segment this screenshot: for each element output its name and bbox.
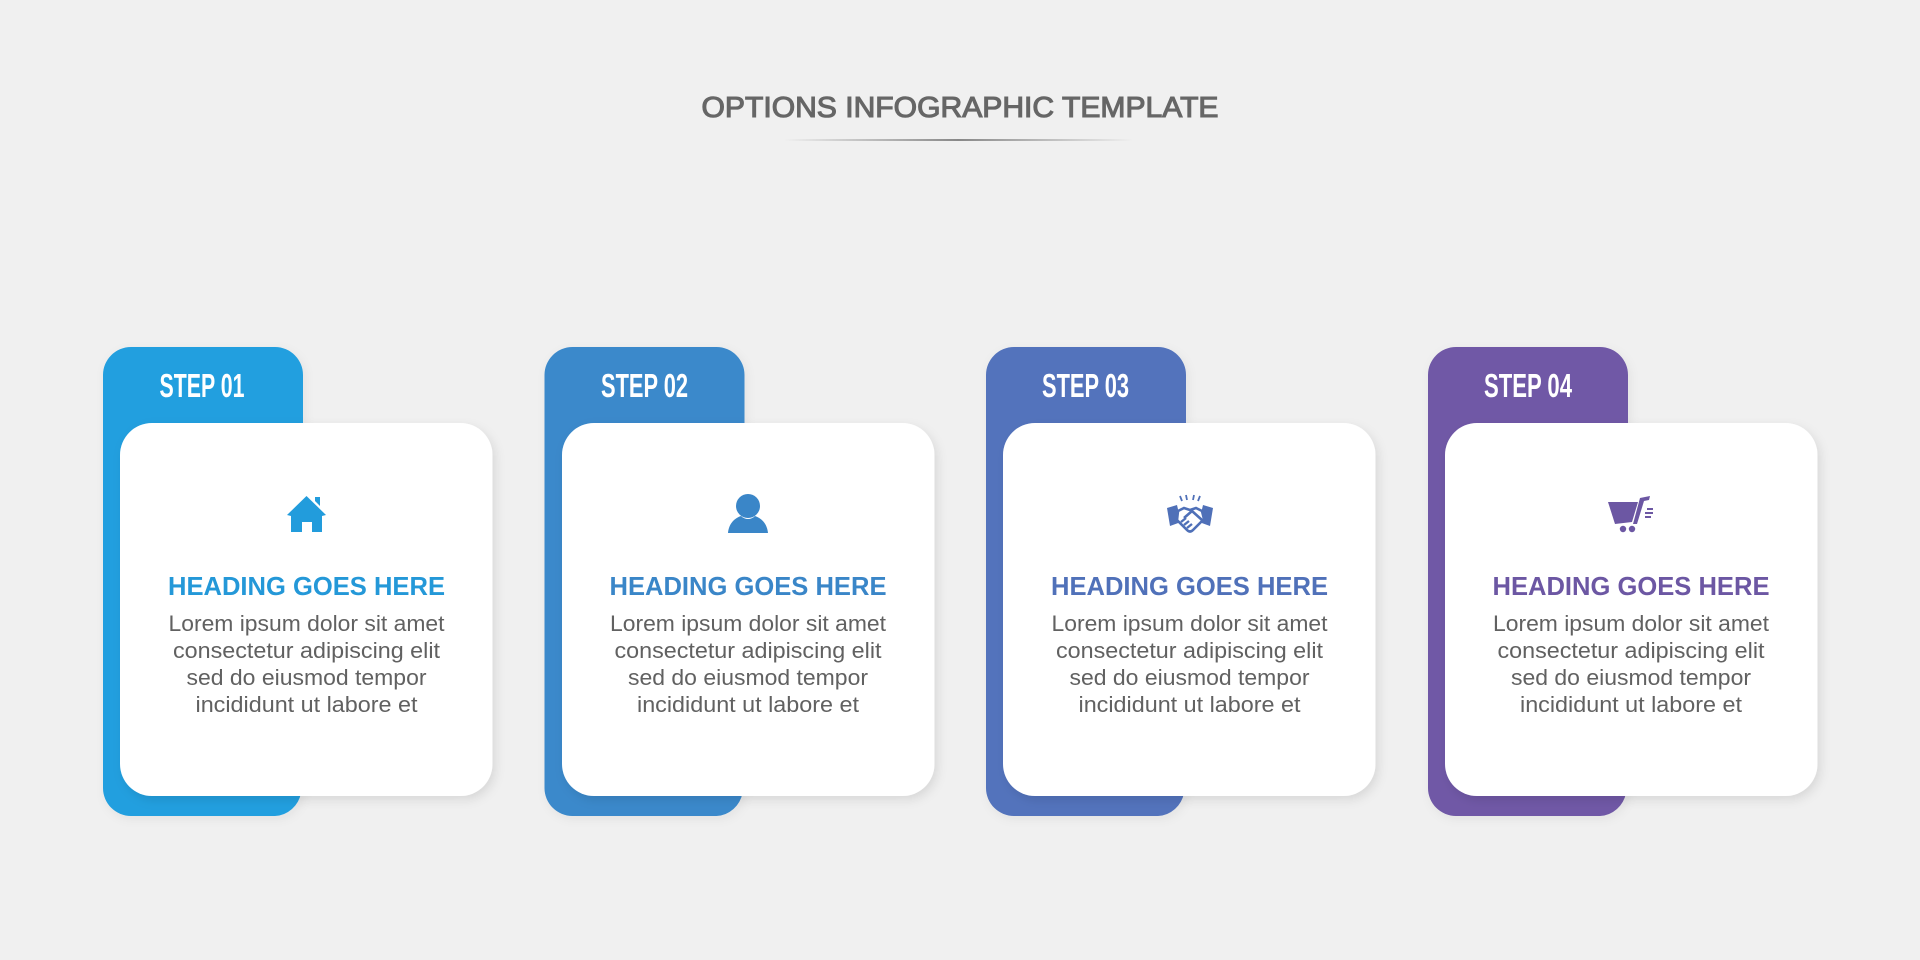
- step 04 description: incididunt ut labore et: [1520, 692, 1742, 717]
- step 03 description: Lorem ipsum dolor sit amet: [1052, 611, 1328, 636]
- step 01 description: Lorem ipsum dolor sit amet: [168, 611, 444, 636]
- step 04 heading: HEADING GOES HERE: [1492, 571, 1770, 601]
- step 02 tab: [544, 347, 744, 816]
- step 01 description: [168, 611, 444, 717]
- step 02 heading: HEADING GOES HERE: [610, 571, 886, 601]
- step 01 heading: HEADING GOES HERE: [168, 571, 445, 601]
- step 02 description: consectetur adipiscing elit: [614, 638, 882, 663]
- step 02 description: [610, 611, 886, 717]
- step 01 label: STEP 01: [160, 367, 244, 404]
- step 01 description: sed do eiusmod tempor: [186, 665, 426, 690]
- step 02 card: [562, 423, 934, 796]
- step 03 label: STEP 03: [1042, 367, 1129, 404]
- step 03 tab: [986, 347, 1186, 816]
- icon: shopping cart: [1608, 496, 1653, 532]
- title: OPTIONS INFOGRAPHIC TEMPLATE: [702, 92, 1218, 124]
- step 04 card: [1445, 423, 1818, 796]
- step 03 description: sed do eiusmod tempor: [1070, 665, 1310, 690]
- step 03 description: consectetur adipiscing elit: [1056, 638, 1323, 663]
- panel: step 02: [544, 347, 934, 816]
- step 03 description: incididunt ut labore et: [1078, 692, 1300, 717]
- step 01 card: [120, 423, 492, 796]
- step 04 description: sed do eiusmod tempor: [1511, 665, 1751, 690]
- step 01 description: consectetur adipiscing elit: [173, 638, 440, 663]
- step 04 tab: [1428, 347, 1628, 816]
- panel: step 03: [986, 347, 1376, 816]
- icon: person: [728, 494, 768, 533]
- icon: house: [287, 496, 326, 532]
- step 03 description: [1052, 611, 1328, 717]
- icon: handshake: [1167, 495, 1213, 532]
- step 02 label: STEP 02: [601, 367, 688, 404]
- title underline: [784, 139, 1133, 141]
- panel: step 04: [1428, 347, 1818, 816]
- step 02 description: Lorem ipsum dolor sit amet: [610, 611, 886, 636]
- step 04 description: Lorem ipsum dolor sit amet: [1493, 611, 1769, 636]
- step 02 description: sed do eiusmod tempor: [628, 665, 868, 690]
- step 01 description: incididunt ut labore et: [196, 692, 418, 717]
- step 04 label: STEP 04: [1484, 367, 1572, 404]
- step 04 description: consectetur adipiscing elit: [1498, 638, 1764, 663]
- step 03 heading: HEADING GOES HERE: [1051, 571, 1328, 601]
- step 03 card: [1003, 423, 1376, 796]
- step 02 description: incididunt ut labore et: [637, 692, 859, 717]
- step 04 description: [1493, 611, 1769, 717]
- panel: step 01: [103, 347, 492, 816]
- step 01 tab: [103, 347, 303, 816]
